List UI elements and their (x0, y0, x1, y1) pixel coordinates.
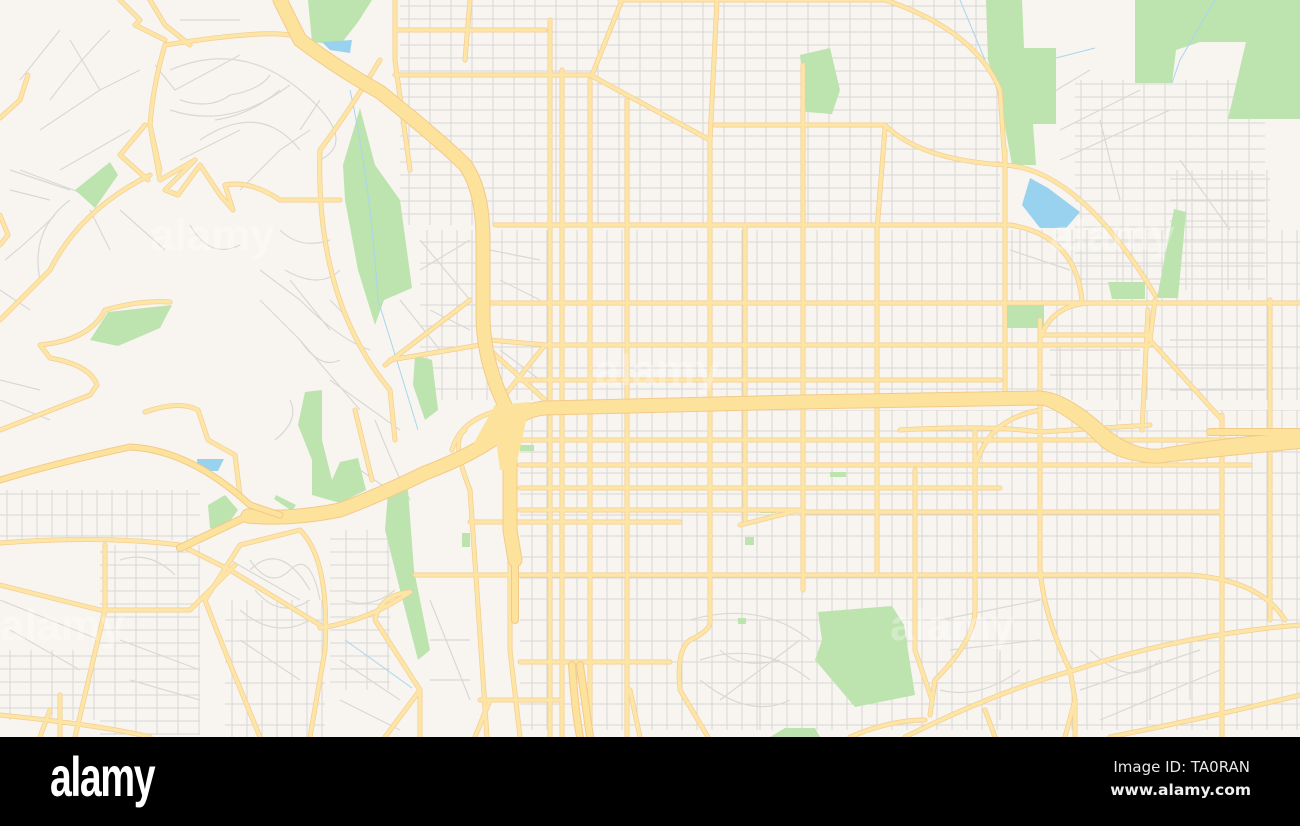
website: www.alamy.com (1110, 781, 1251, 799)
streams (345, 0, 1215, 688)
interchange (470, 402, 530, 470)
park: golf course (298, 390, 366, 503)
park: east block (1007, 304, 1044, 328)
park: north east strip (986, 0, 1056, 165)
park: east strip (1157, 209, 1186, 298)
footer bar (0, 737, 1300, 826)
park: south edge (770, 728, 820, 737)
park: north wash (308, 0, 372, 45)
park: river strip (385, 490, 430, 660)
lake: north pond (322, 40, 352, 53)
watermark (0, 211, 1175, 650)
park: west (208, 495, 238, 532)
logo: alamy (50, 745, 154, 808)
watermark: alamy (595, 346, 720, 395)
secondary freeway casing (180, 400, 1300, 737)
image id: Image ID: TA0RAN (1113, 758, 1250, 776)
water (197, 40, 1080, 471)
watermark: alamy (150, 211, 275, 260)
park: central hill (90, 305, 172, 346)
small greens (274, 445, 846, 624)
park: hill (75, 162, 118, 208)
park: far north east (1135, 0, 1300, 119)
secondary freeway fill (180, 400, 1300, 737)
freeway fill (248, 0, 1300, 560)
watermark: alamy (1050, 211, 1175, 260)
park: small (413, 355, 438, 420)
watermark: alamy (890, 601, 1015, 650)
lake: west pond (197, 459, 224, 471)
park: south large (815, 606, 915, 707)
watermark: alamy (0, 601, 125, 650)
lake: east reservoir (1022, 178, 1080, 228)
west freeway (0, 447, 280, 515)
park: long basin (343, 108, 412, 325)
park: east small (1108, 282, 1145, 299)
freeway casing (248, 0, 1300, 560)
park: top centre (800, 48, 840, 114)
